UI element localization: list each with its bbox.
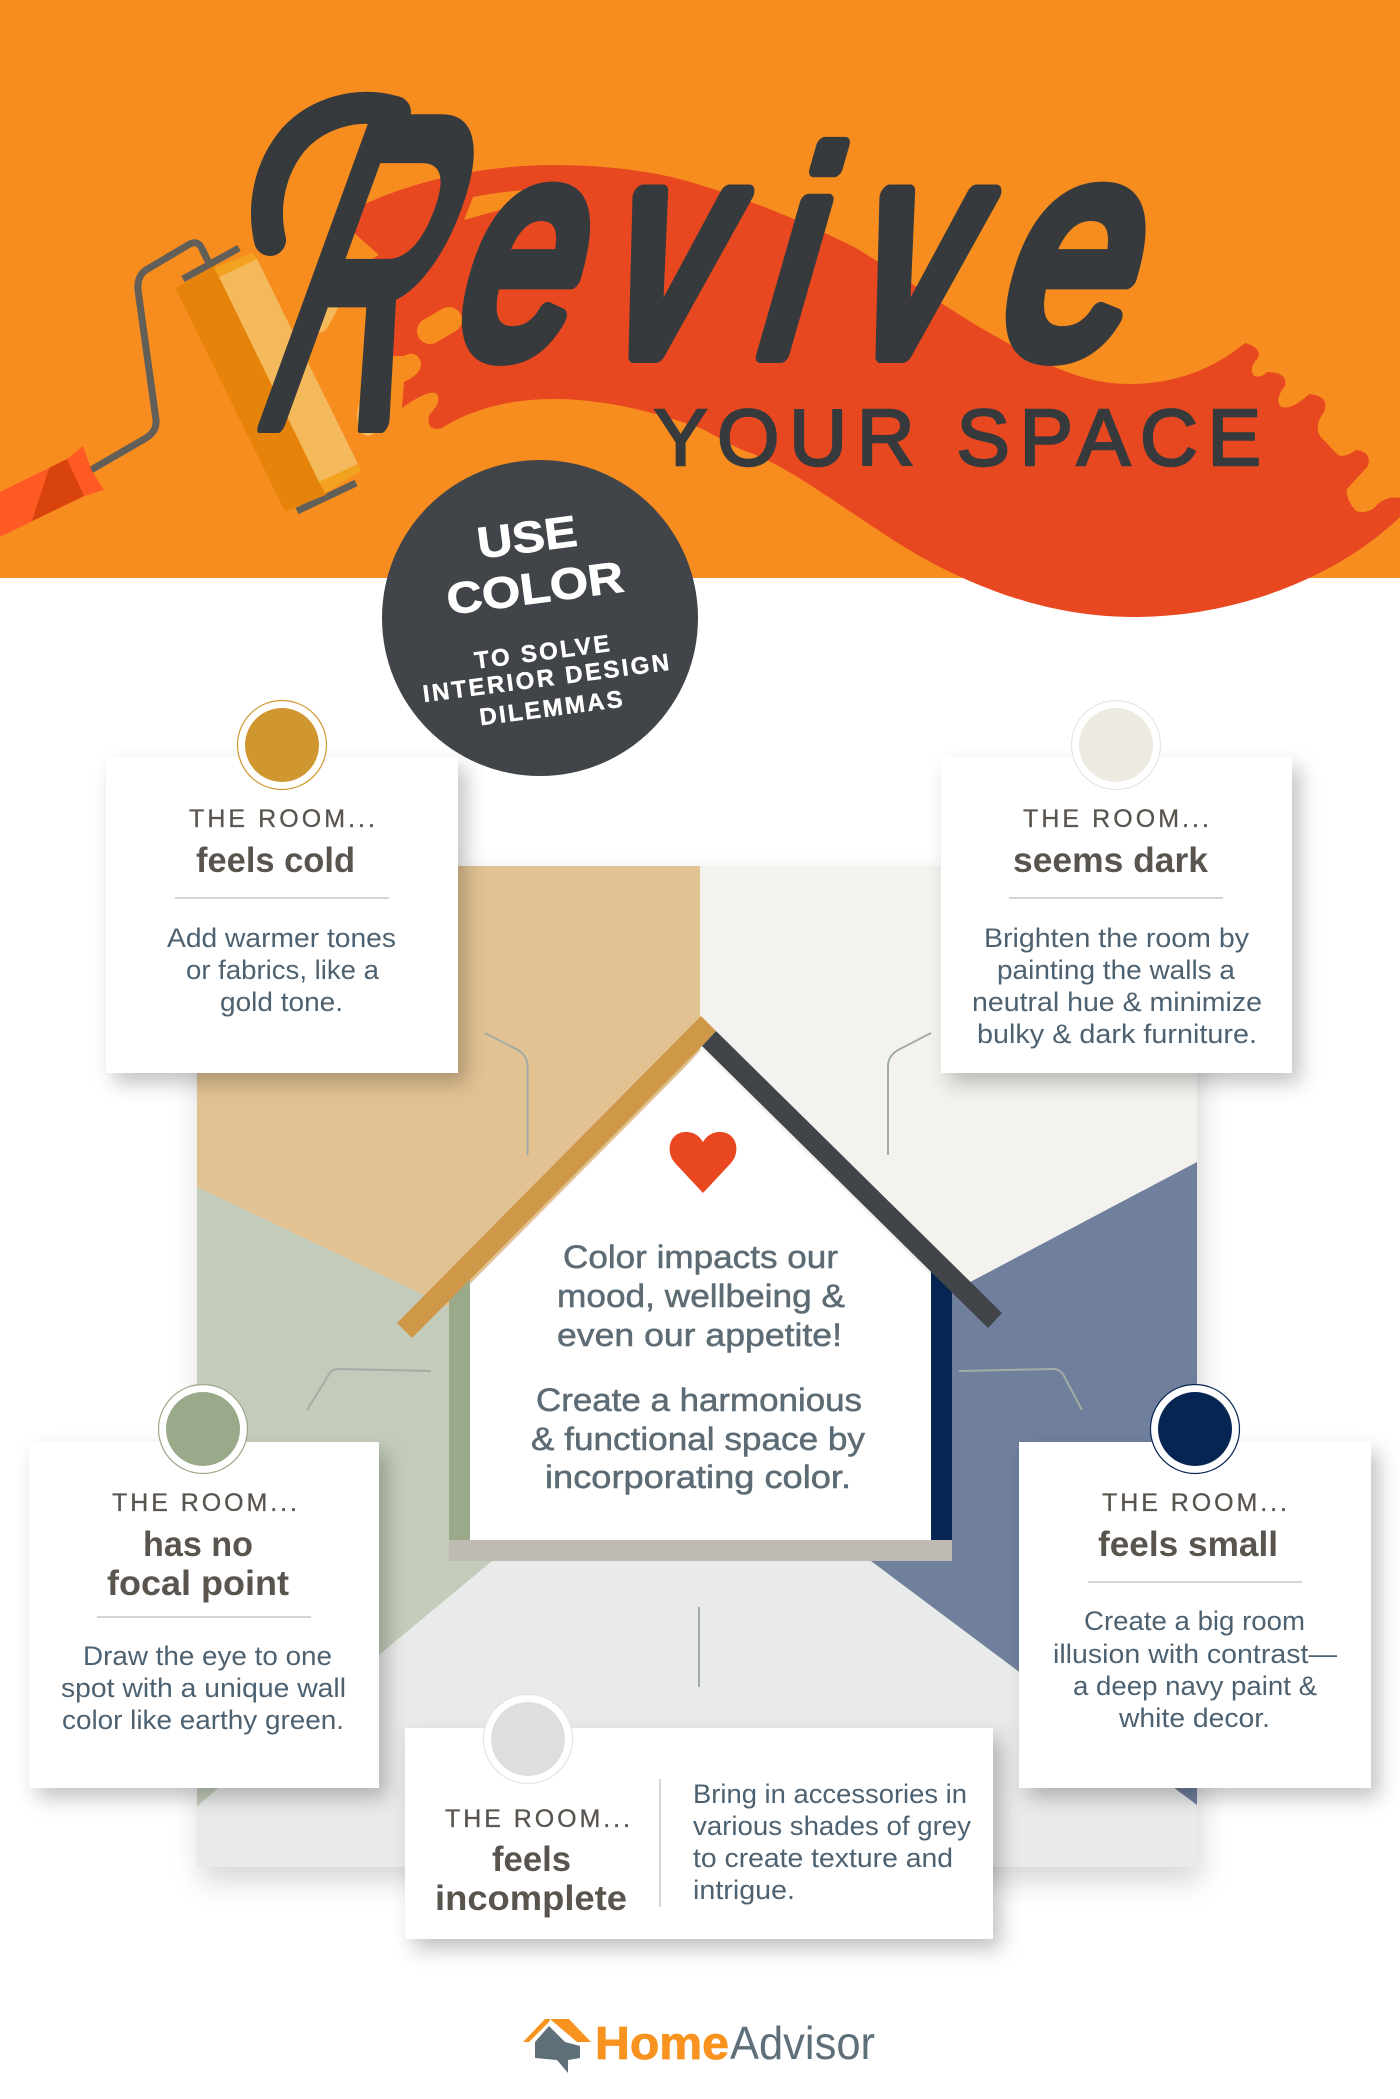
panel: color wedges room bbox=[197, 866, 1197, 1867]
card: feels incomplete: intrigue. bbox=[693, 1875, 795, 1905]
house message: mood, wellbeing & bbox=[557, 1278, 845, 1314]
title: Revive: e bbox=[427, 82, 639, 417]
card: feels incomplete bbox=[405, 1694, 993, 1939]
card: has no focal point: THE ROOM... bbox=[112, 1489, 297, 1517]
card: seems dark: Brighten the room by bbox=[984, 923, 1250, 953]
badge: use color: INTERIOR DESIGN bbox=[421, 649, 671, 708]
card: seems dark: seems dark bbox=[1013, 841, 1209, 880]
subtitle: your space: YOUR SPACE bbox=[654, 393, 1261, 482]
badge: use color bbox=[382, 460, 698, 776]
title: Revive: v bbox=[576, 81, 780, 417]
paint splash bbox=[342, 165, 1400, 617]
badge: use color: USE bbox=[474, 507, 580, 568]
card: feels cold: feels cold bbox=[196, 841, 355, 880]
card: feels cold: THE ROOM... bbox=[189, 805, 375, 833]
card: feels incomplete: various shades of grey bbox=[693, 1811, 972, 1841]
house message bbox=[531, 1239, 865, 1495]
card: feels cold: gold tone. bbox=[220, 987, 343, 1017]
card: seems dark: neutral hue & minimize bbox=[972, 987, 1262, 1017]
card: feels small: THE ROOM... bbox=[1102, 1489, 1287, 1517]
house message: & functional space by bbox=[531, 1421, 865, 1457]
house message: incorporating color. bbox=[545, 1459, 851, 1495]
card: feels incomplete: Bring in accessories in bbox=[693, 1779, 967, 1809]
card: seems dark: THE ROOM... bbox=[1023, 805, 1209, 833]
house message: even our appetite! bbox=[557, 1317, 842, 1353]
badge: use color: TO SOLVE bbox=[473, 630, 611, 675]
card: feels incomplete: to create texture and bbox=[693, 1843, 953, 1873]
logo: HomeAdvisor: Home bbox=[595, 2017, 729, 2069]
badge: use color: COLOR bbox=[444, 553, 627, 625]
card: feels incomplete: incomplete bbox=[435, 1879, 627, 1918]
icon: heart bbox=[670, 1132, 736, 1193]
title: Revive: R bbox=[211, 26, 539, 519]
card: has no focal point: has no bbox=[143, 1525, 253, 1564]
icon: paint roller bbox=[0, 243, 379, 537]
card: feels small bbox=[1019, 1384, 1371, 1788]
house message: Color impacts our bbox=[563, 1239, 838, 1275]
title: Revive: v bbox=[823, 81, 1027, 417]
title: Revive bbox=[211, 26, 1196, 519]
card: has no focal point: spot with a unique wall bbox=[61, 1673, 346, 1703]
card: seems dark: painting the walls a bbox=[997, 955, 1236, 985]
card: feels small: white decor. bbox=[1118, 1703, 1270, 1733]
card: feels incomplete: THE ROOM... bbox=[445, 1805, 630, 1833]
card: feels incomplete: feels bbox=[492, 1840, 571, 1879]
logo: HomeAdvisor: Advisor bbox=[730, 2017, 875, 2069]
badge: use color: DILEMMAS bbox=[478, 686, 624, 731]
house message: Create a harmonious bbox=[536, 1382, 862, 1418]
title: Revive: i bbox=[729, 93, 874, 418]
connector lines bbox=[307, 1033, 1082, 1687]
card: seems dark bbox=[941, 700, 1292, 1073]
card: has no focal point: color like earthy green. bbox=[62, 1705, 344, 1735]
card: feels small: feels small bbox=[1098, 1525, 1278, 1564]
title: Revive: e bbox=[970, 82, 1196, 417]
card: seems dark: bulky & dark furniture. bbox=[977, 1019, 1257, 1049]
header background bbox=[0, 0, 1400, 578]
card: feels small: illusion with contrast— bbox=[1053, 1639, 1337, 1669]
logo: HomeAdvisor bbox=[523, 2017, 875, 2073]
card: feels small: a deep navy paint & bbox=[1073, 1671, 1317, 1701]
house bbox=[397, 1016, 1002, 1561]
card: feels small: Create a big room bbox=[1084, 1606, 1305, 1636]
card: feels cold: or fabrics, like a bbox=[186, 955, 380, 985]
card: feels cold: Add warmer tones bbox=[167, 923, 396, 953]
card: has no focal point bbox=[29, 1384, 379, 1788]
card: feels cold bbox=[106, 700, 458, 1073]
card: has no focal point: focal point bbox=[107, 1564, 289, 1603]
card: has no focal point: Draw the eye to one bbox=[83, 1641, 332, 1671]
